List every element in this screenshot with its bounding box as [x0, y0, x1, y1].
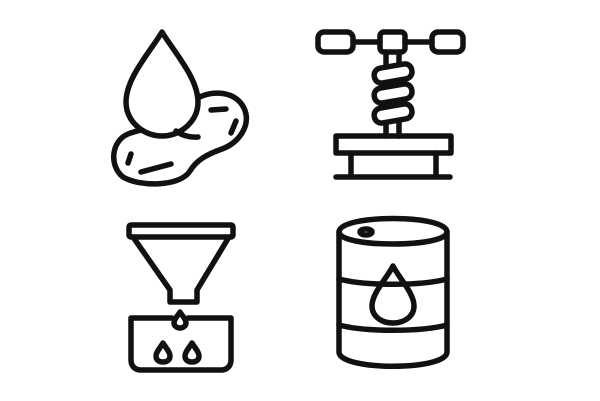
barrel body — [339, 218, 447, 366]
drop — [126, 32, 198, 136]
oil drop — [372, 266, 414, 323]
falling drip — [174, 312, 186, 328]
platform — [336, 136, 451, 153]
basin — [131, 318, 231, 370]
drops — [156, 343, 170, 362]
bands — [339, 279, 447, 330]
icon: funnel and basin — [129, 225, 233, 370]
icon: screw press — [318, 32, 463, 177]
funnel — [129, 225, 233, 237]
peanut — [114, 93, 246, 184]
screw shaft and coil — [386, 52, 399, 136]
icon: oil barrel — [339, 218, 447, 366]
bung hole — [360, 229, 372, 235]
handles — [318, 32, 353, 52]
icon: oil drop on peanut — [114, 32, 246, 184]
